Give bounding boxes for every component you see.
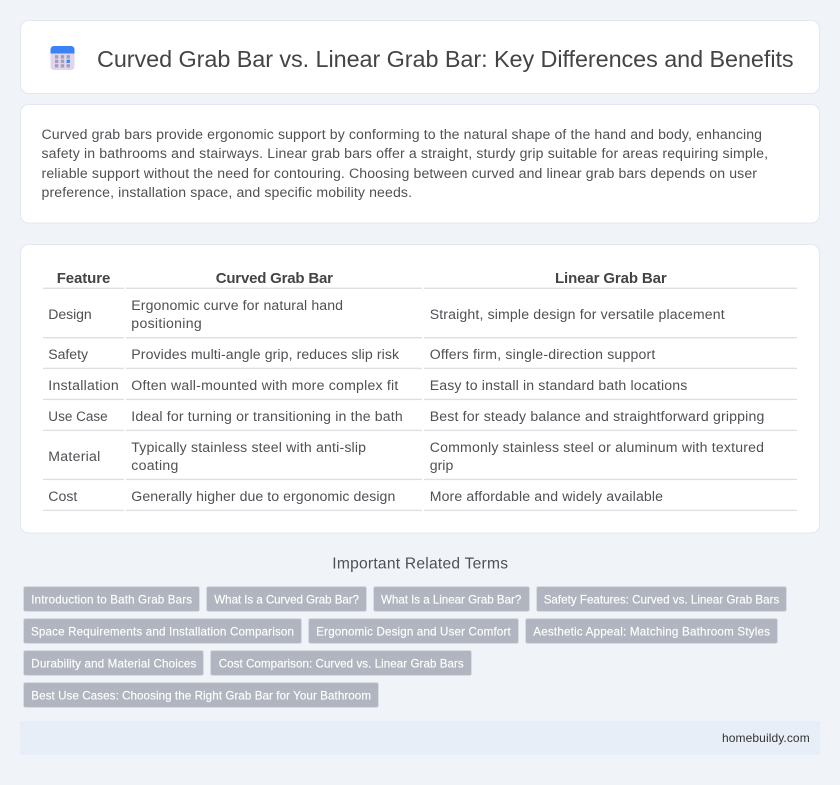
row: cost: More affordable and widely available xyxy=(430,488,663,504)
tag xyxy=(206,586,366,612)
row: material: Typically stainless steel with anti-slip xyxy=(131,439,366,455)
tag: Ergonomic Design and User Comfort xyxy=(316,625,511,638)
table header row: Feature xyxy=(57,270,110,287)
footer xyxy=(20,721,820,755)
row: use case: Best for steady balance and straightforward gripping xyxy=(430,408,764,424)
tag: What Is a Curved Grab Bar? xyxy=(214,593,360,606)
row: design: Straight, simple design for versatile placement xyxy=(430,306,725,322)
tag: Best Use Cases: Choosing the Right Grab Bar for Your Bathroom xyxy=(31,689,371,702)
heading: important related terms: Important Related Terms xyxy=(332,555,508,572)
row: use case xyxy=(48,408,764,424)
tag xyxy=(374,586,530,612)
intro text block xyxy=(42,126,768,200)
tag xyxy=(24,650,204,676)
row: installation: Often wall-mounted with more complex fit xyxy=(131,377,398,393)
row: safety xyxy=(48,346,655,362)
table header row: Linear Grab Bar xyxy=(555,270,667,287)
panel: header xyxy=(20,20,820,94)
panel: introduction xyxy=(20,104,820,223)
row: cost xyxy=(48,488,663,504)
tag xyxy=(24,682,378,708)
tag xyxy=(210,650,472,676)
row: material: Commonly stainless steel or aluminum with textured xyxy=(430,439,764,455)
row: use case: Use Case xyxy=(48,409,108,424)
row: safety: Offers firm, single-direction support xyxy=(430,346,655,362)
tag xyxy=(308,618,518,644)
tag xyxy=(536,586,786,612)
tag: Aesthetic Appeal: Matching Bathroom Styles xyxy=(533,625,770,638)
tag: Cost Comparison: Curved vs. Linear Grab Bars xyxy=(219,657,464,670)
table header row xyxy=(57,270,667,287)
intro text block: reliable support without the need for contouring. Choosing between curved and linear grab bars depends on user xyxy=(42,165,757,181)
row: design: positioning xyxy=(131,315,202,331)
row: installation: Installation xyxy=(48,377,119,393)
tag: What Is a Linear Grab Bar? xyxy=(381,593,522,606)
row: material xyxy=(48,439,764,473)
row: material: Material xyxy=(48,448,100,464)
tag: Introduction to Bath Grab Bars xyxy=(31,593,192,606)
row: cost: Generally higher due to ergonomic design xyxy=(131,488,395,504)
tag: Safety Features: Curved vs. Linear Grab Bars xyxy=(544,593,780,606)
table header row: Curved Grab Bar xyxy=(216,270,333,287)
tag xyxy=(24,586,200,612)
row: installation xyxy=(48,377,687,393)
title: Curved Grab Bar vs. Linear Grab Bar: Key Differences and Benefits xyxy=(97,46,794,72)
row: design xyxy=(48,297,725,331)
row: material: grip xyxy=(430,457,453,473)
row: use case: Ideal for turning or transitioning in the bath xyxy=(131,408,403,424)
row: material: coating xyxy=(131,457,178,473)
tag xyxy=(24,618,302,644)
tag: Space Requirements and Installation Comparison xyxy=(31,625,294,638)
row: design: Design xyxy=(48,306,92,322)
intro text block: preference, installation space, and specific mobility needs. xyxy=(42,184,412,200)
row: design: Ergonomic curve for natural hand xyxy=(131,297,343,313)
intro text block: safety in bathrooms and stairways. Linear grab bars offer a straight, sturdy grip suitable for areas requiring simple, xyxy=(42,145,768,161)
row: safety: Provides multi-angle grip, reduces slip risk xyxy=(131,346,400,362)
related term tags xyxy=(24,586,786,708)
icon: calendar xyxy=(50,46,74,70)
panel: comparison table xyxy=(20,244,820,533)
row: safety: Safety xyxy=(48,346,89,362)
footer: homebuildy.com xyxy=(722,731,810,745)
tag xyxy=(526,618,778,644)
row: cost: Cost xyxy=(48,488,77,504)
row: installation: Easy to install in standard bath locations xyxy=(430,377,687,393)
intro text block: Curved grab bars provide ergonomic support by conforming to the natural shape of the hand and body, enhancing xyxy=(42,126,762,142)
tag: Durability and Material Choices xyxy=(31,657,197,670)
